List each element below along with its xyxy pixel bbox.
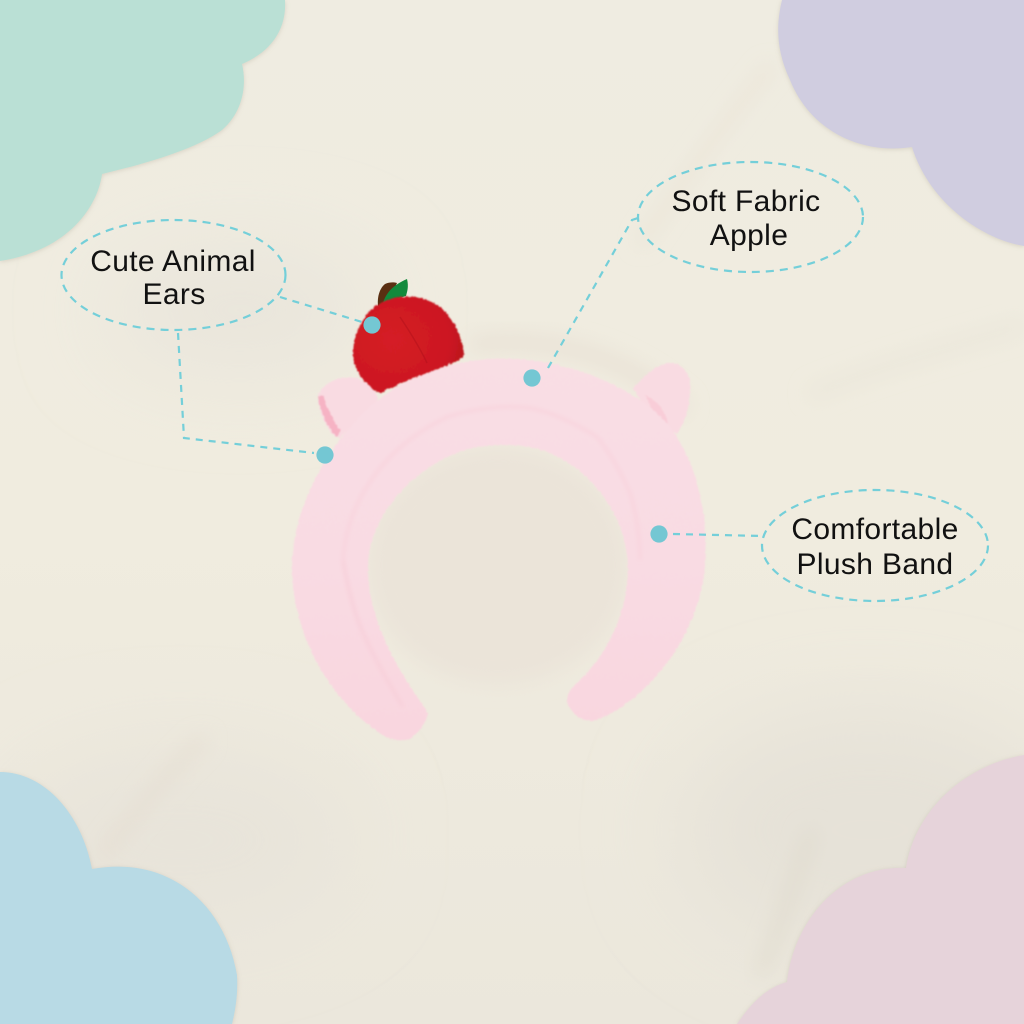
callout: cute animal ears: Cute Animal [90, 245, 256, 278]
left ear [318, 377, 378, 438]
marker dot: ears [316, 446, 334, 464]
leaf [383, 279, 408, 303]
cloud: bottom right pink [737, 755, 1024, 1024]
leader line: soft fabric [548, 218, 638, 368]
cloud: top right lavender [778, 0, 1024, 246]
soft interior shadow [366, 445, 630, 685]
marker dot: fabric [523, 369, 541, 387]
callout: cute animal ears: Ears [142, 278, 206, 311]
plush fabric [292, 358, 706, 740]
cloud: top left mint [0, 0, 285, 261]
callout: soft fabric apple [638, 162, 863, 272]
apple body [353, 297, 464, 393]
cloud: bottom left blue [0, 772, 237, 1024]
marker dot: plush band [650, 525, 668, 543]
apple [353, 279, 464, 393]
leader line: ears [178, 333, 314, 453]
stem [378, 282, 397, 306]
callout: soft fabric apple: Apple [710, 219, 788, 252]
band [292, 358, 706, 740]
apple seam [400, 317, 427, 363]
headband product [292, 279, 706, 740]
left ear inner edge [318, 396, 341, 437]
band seam lower left [343, 560, 403, 707]
right ear [633, 363, 690, 434]
callout: cute animal ears [62, 220, 286, 330]
cast shadow above band [470, 342, 685, 410]
band seam [343, 407, 640, 560]
callout: comfortable plush band [762, 490, 988, 601]
right ear inner [645, 395, 668, 424]
callout: comfortable plush band: Comfortable [791, 513, 959, 546]
callout: comfortable plush band: Plush Band [797, 548, 953, 581]
callout: soft fabric apple: Soft Fabric [672, 185, 820, 218]
leader line: plush band [673, 534, 763, 536]
leader line: apple [280, 297, 362, 322]
marker dot: apple [363, 316, 381, 334]
